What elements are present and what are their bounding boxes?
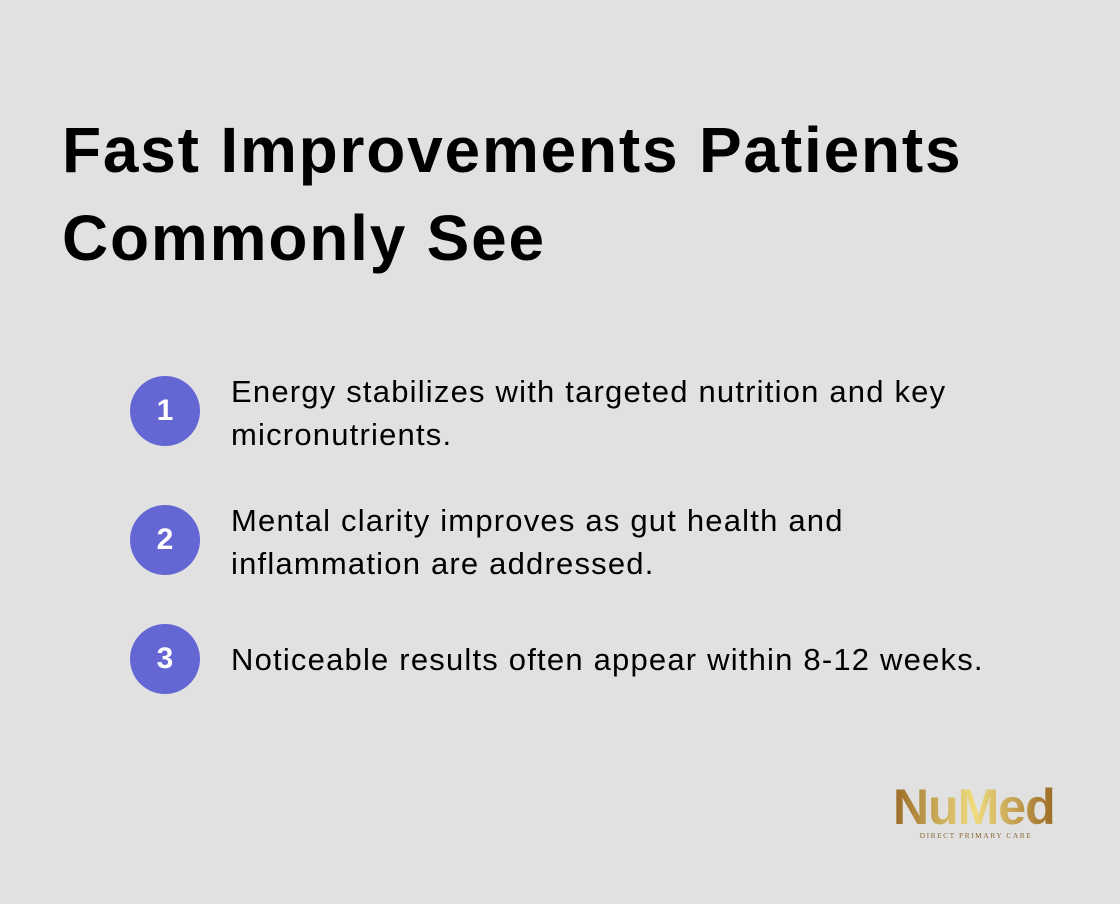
- text 2: Mental clarity improves as gut health and: [231, 503, 844, 538]
- badge 2: [130, 505, 200, 575]
- text 1: [231, 374, 946, 452]
- badge 3: [130, 624, 200, 694]
- badge 3: 3: [157, 642, 173, 675]
- title: [62, 114, 962, 274]
- title: Commonly See: [62, 202, 546, 274]
- badge 1: [130, 376, 200, 446]
- text 3: Noticeable results often appear within 8-12 weeks.: [231, 642, 984, 677]
- item 1: [130, 374, 946, 452]
- text 2: [231, 503, 844, 581]
- text 1: micronutrients.: [231, 417, 452, 452]
- text 1: Energy stabilizes with targeted nutrition and key: [231, 374, 946, 409]
- item 2: [130, 503, 844, 581]
- badge 1: 1: [157, 394, 173, 427]
- logo: NuMed: [893, 779, 1055, 835]
- title: Fast Improvements Patients: [62, 114, 962, 186]
- badge 2: 2: [157, 523, 173, 556]
- text 2: inflammation are addressed.: [231, 546, 655, 581]
- item 3: [130, 624, 984, 694]
- logo: DIRECT PRIMARY CARE: [920, 831, 1032, 840]
